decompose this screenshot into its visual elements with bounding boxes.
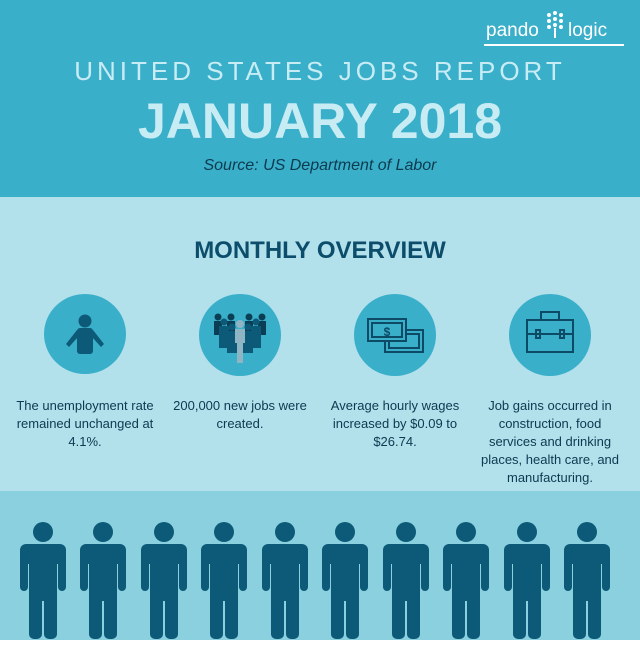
icon: briefcase — [509, 294, 591, 376]
caption 3: Average hourly wages increased by $0.09 to $26.74. — [331, 398, 459, 449]
title line 2: JANUARY 2018 — [138, 93, 502, 149]
title line 1: UNITED STATES JOBS REPORT — [74, 56, 566, 86]
caption 2: 200,000 new jobs were created. — [173, 398, 307, 431]
figures — [20, 522, 610, 639]
heading: MONTHLY OVERVIEW — [194, 237, 446, 264]
logo: pando — [486, 20, 539, 41]
header band — [0, 0, 640, 197]
icon: person — [44, 294, 126, 374]
source: Source: US Department of Labor — [203, 157, 436, 174]
overview band — [0, 197, 640, 491]
logo — [484, 11, 624, 46]
icon: money: $ — [384, 325, 391, 339]
caption 1: The unemployment rate remained unchanged at 4.1%. — [16, 398, 154, 449]
icon: money — [354, 294, 436, 376]
logo: logic — [568, 20, 607, 41]
caption 4: Job gains occurred in construction, food services and drinking places, health care, and manufacturing. — [481, 398, 619, 485]
icon: crowd — [199, 294, 281, 376]
people row band — [0, 491, 640, 640]
